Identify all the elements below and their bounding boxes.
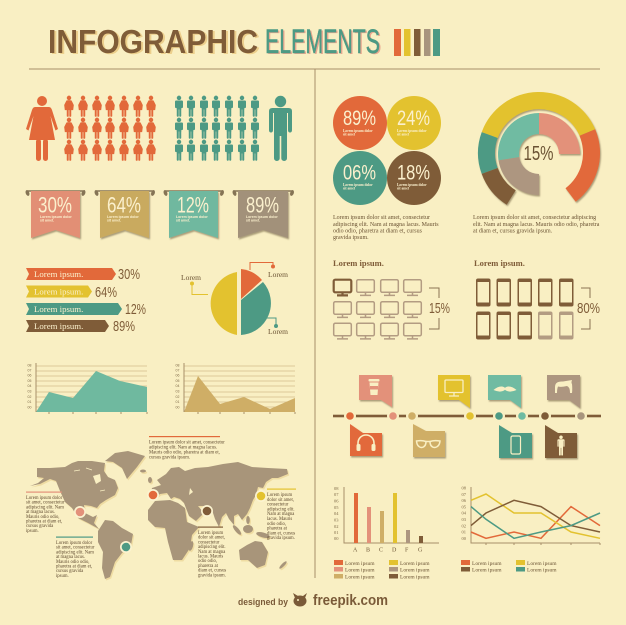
text block: donut caption (473, 215, 600, 234)
chart: line chart: 06 (462, 498, 467, 503)
panel: monitors pictogram (333, 258, 450, 339)
map note: yellow: lacus. Mauris (267, 517, 292, 522)
banner 12% (163, 190, 225, 238)
bar 12%: Lorem ipsum. (34, 304, 83, 314)
banner 12%: Lorem ipsum dolor (176, 215, 208, 219)
map note: orange: adipiscing elit. Nam at magna lacus. (149, 446, 217, 450)
chart: tan area chart: 08 (176, 364, 179, 368)
circle 89%: sit amet (343, 132, 356, 136)
icon: coffee cup (368, 379, 380, 395)
legend: line chart: Lorem ipsum (527, 561, 557, 567)
map note: brown: Lorem ipsum (198, 531, 223, 536)
chart: radial donut: 15% (524, 143, 554, 165)
map note: teal: Lorem ipsum dolor (56, 541, 93, 546)
chart: pie: Lorem (268, 327, 288, 336)
map note: yellow: adipiscing elit. (267, 507, 295, 512)
chart: bar chart: C (379, 548, 383, 554)
map note: teal: at magna lacus. (56, 555, 85, 560)
marker: yellow (255, 490, 267, 502)
circle 06%: 06% (343, 162, 376, 184)
banner 89%: Lorem ipsum dolor (246, 215, 278, 219)
bar 89% (26, 318, 135, 335)
callout: mustache (488, 375, 521, 408)
map note: yellow (267, 488, 296, 541)
panel: women pictogram (26, 96, 156, 161)
title: ELEMENTS (266, 24, 382, 62)
chart: bar chart: 02 (334, 524, 338, 529)
text block: circles caption: gravida ipsum. (333, 235, 369, 241)
callout: headphones (350, 424, 382, 456)
banner 12%: sit amet. (176, 218, 190, 222)
circle 18%: 18% (397, 162, 430, 184)
chart: line chart: 08 (462, 486, 467, 490)
chart: bar chart: B (366, 548, 370, 554)
map note: salmon: sit amet, consectetur (26, 501, 65, 506)
map note: brown: lacus. Mauris (198, 554, 223, 560)
chart: mint area chart: 02 (28, 395, 31, 399)
chart: tan area chart: 03 (176, 390, 179, 394)
chart: bar chart: D (392, 548, 397, 554)
map note: yellow: odio odio, (267, 522, 286, 527)
icon: large woman (26, 96, 58, 161)
banner 30%: Lorem ipsum dolor (40, 215, 72, 219)
icon: monitor (445, 380, 463, 396)
banner 89% (232, 190, 295, 238)
icon: mustache (494, 386, 516, 392)
legend: bar chart: Lorem ipsum (400, 574, 430, 580)
map note: yellow: Nam at magna (267, 512, 295, 517)
banner 30%: 30% (38, 192, 72, 218)
chart: bar chart: 06 (334, 498, 339, 504)
marker: brown (201, 505, 213, 517)
bar 30% (26, 266, 140, 283)
footer credit: designed by (238, 597, 289, 608)
map note: yellow: Lorem ipsum (267, 493, 292, 498)
map note: teal: adipiscing elit. Nam (56, 550, 94, 555)
map note: yellow: dolor sit amet, (267, 498, 294, 503)
map note: yellow: consectetur (267, 503, 289, 508)
icon: phone (511, 436, 520, 454)
monitors grid (334, 280, 421, 339)
bar 64%: Lorem ipsum. (34, 286, 83, 296)
banner 64%: Lorem ipsum dolor (107, 215, 139, 219)
bar 89%: 89% (113, 318, 135, 335)
chart: pie: Lorem (181, 273, 201, 282)
map note: orange: Mauris odio odio, pharetra at diam et, (149, 450, 220, 456)
callout: glasses (413, 424, 445, 457)
icon: glasses (416, 441, 440, 448)
banner 64%: sit amet. (107, 218, 121, 222)
circle 18% (387, 151, 441, 205)
map note: orange: Lorem ipsum dolor sit amet, consectetur (149, 440, 225, 446)
chart: mint area chart: 07 (28, 368, 31, 372)
text block: circles caption: Lorem ipsum dolor sit amet, consectetur (333, 215, 430, 221)
callout: coffee cup (359, 375, 392, 407)
bar 64% (26, 284, 117, 301)
chart: line chart: 01 (462, 530, 466, 534)
map note: teal: ipsum. (56, 574, 69, 579)
women rows (64, 96, 156, 161)
circle 06%: Lorem ipsum dolor (343, 183, 373, 187)
circle 24%: 24% (397, 107, 430, 130)
map note: salmon: Mauris odio odio, (26, 515, 59, 520)
chart: mint area chart: 03 (28, 390, 31, 394)
chart: pie (181, 262, 288, 336)
chart: mint area chart: 05 (28, 379, 31, 383)
map note: brown: diam et, cursus (198, 569, 226, 574)
chart: bar chart: A (353, 548, 358, 554)
legend: bar chart: Lorem ipsum (345, 568, 375, 574)
chart: bar chart (334, 486, 439, 554)
footer credit (238, 592, 388, 609)
icon: hair (555, 380, 572, 393)
callout: monitor (438, 375, 470, 408)
bar 64%: 64% (95, 284, 117, 301)
circle 89%: Lorem ipsum dolor (343, 129, 373, 133)
chart: tan area chart: 02 (176, 395, 179, 399)
phones grid (476, 278, 574, 340)
map note: brown: gravida ipsum. (198, 573, 226, 578)
map note: teal: cursus gravida (56, 569, 84, 574)
map note: brown (198, 526, 226, 578)
chart: bar chart: 04 (334, 511, 339, 516)
bar 12%: 12% (125, 301, 146, 318)
map note: yellow: diam et, cursus (267, 531, 295, 536)
map note: teal: Mauris odio odio, (56, 560, 89, 565)
map note: salmon (26, 492, 65, 534)
title (48, 23, 382, 62)
callout: hair (547, 375, 580, 408)
map note: yellow: gravida ipsum. (267, 536, 295, 541)
chart: line chart: 05 (462, 504, 467, 510)
map note: teal: pharetra at diam et, (56, 564, 92, 570)
map note: yellow: pharetra at (267, 527, 288, 532)
text block: donut caption: Lorem ipsum dolor sit amet, consectetur adipiscing (473, 215, 596, 221)
icon: freepik logo (293, 593, 307, 606)
map note: salmon: ipsum. (26, 529, 39, 534)
legend: line chart: Lorem ipsum (527, 568, 557, 574)
chart: mint area chart: 04 (28, 384, 31, 388)
chart: line chart: 02 (462, 524, 466, 528)
chart: tan area chart: 05 (176, 379, 179, 383)
circle 24% (387, 96, 441, 150)
circle 24%: sit amet (397, 132, 410, 136)
map note: teal: sit amet, consectetur (56, 546, 95, 551)
banner 30% (25, 190, 86, 238)
text block: circles caption: adipiscing elit. Nam at magna lacus. Mauris (333, 222, 439, 228)
chart: tan area chart: 07 (176, 368, 179, 372)
legend: bar chart: Lorem ipsum (400, 568, 430, 574)
heading: Lorem ipsum. (474, 258, 525, 268)
chart: line chart: 07 (462, 492, 467, 497)
banner 89%: sit amet. (246, 218, 260, 222)
chart: tan area chart: 04 (176, 384, 179, 388)
text block: circles caption (333, 215, 439, 241)
text block: donut caption: elit. Nam at magna lacus. Mauris odio odio, pharetra (473, 222, 600, 228)
title: INFOGRAPHIC (48, 23, 258, 60)
circle 89% (333, 96, 387, 150)
bar 30%: Lorem ipsum. (34, 269, 83, 279)
panel: percentage circles (333, 96, 441, 205)
chart: line chart: 00 (462, 536, 467, 541)
chart: radial donut (478, 92, 600, 205)
chart: bar chart: 00 (334, 536, 339, 541)
panel: ribbon banners (25, 190, 295, 238)
chart: line chart: 03 (462, 517, 467, 522)
chart: arrow bars (26, 266, 146, 335)
legend: line chart: Lorem ipsum (472, 561, 502, 567)
circle 18%: Lorem ipsum dolor (397, 183, 427, 187)
chart: mint area chart: 06 (28, 374, 31, 378)
banner 12%: 12% (177, 192, 209, 218)
chart: bar chart: G (418, 548, 423, 554)
circle 06% (333, 151, 387, 205)
panel: phones pictogram (474, 258, 600, 340)
bar 12% (26, 301, 146, 318)
text block: donut caption: at diam et, cursus gravida ipsum. (473, 228, 553, 234)
map note: brown: dolor sit amet, (198, 536, 225, 541)
circle 18%: sit amet (397, 186, 410, 190)
callout: phone (499, 425, 532, 458)
banner 30%: sit amet. (40, 218, 54, 222)
marker: salmon (74, 506, 86, 518)
chart: world map (30, 451, 289, 580)
title: ELEMENTS (265, 23, 380, 61)
map note: brown: consectetur (198, 540, 220, 545)
map note: salmon: adipiscing elit. Nam (26, 505, 64, 510)
bracket and value: 80% (577, 300, 600, 317)
chart: mint area chart: 08 (28, 364, 31, 368)
chart: line chart: 04 (462, 510, 467, 516)
banner 89%: 89% (246, 192, 279, 218)
heading: Lorem ipsum. (333, 258, 384, 268)
circle 24%: Lorem ipsum dolor (397, 129, 427, 133)
men rows (175, 96, 259, 161)
chart: bar chart: F (405, 548, 409, 554)
bar 89%: Lorem ipsum. (34, 321, 83, 331)
chart: bar chart: 03 (334, 518, 339, 522)
map note: teal (56, 536, 95, 579)
chart: mint area chart: 00 (28, 406, 31, 410)
legend: bar chart: Lorem ipsum (345, 561, 375, 567)
marker: teal (120, 541, 132, 553)
circle 06%: sit amet (343, 186, 356, 190)
icon: person (557, 435, 565, 456)
panel: men pictogram (175, 96, 292, 161)
bracket and value: 15% (429, 300, 450, 317)
chart: mint area chart (28, 363, 147, 414)
chart: line chart (462, 486, 600, 545)
colour stripes (394, 29, 440, 56)
map note: salmon: Lorem ipsum dolor (26, 496, 63, 501)
map note: brown: pharetra at (198, 564, 219, 569)
map note: brown: Nam at magna (198, 550, 226, 555)
map note: salmon: cursus gravida (26, 524, 54, 529)
text block: circles caption: odio odio, pharetra at diam et, cursus (333, 228, 423, 234)
map note: orange (149, 436, 225, 460)
legend: bar chart (334, 560, 430, 580)
chart: tan area chart: 06 (176, 374, 179, 378)
map note: salmon: at magna lacus. (26, 510, 55, 515)
banner 64% (94, 190, 156, 238)
chart: bar chart: 08 (334, 486, 339, 491)
chart: tan area chart (176, 363, 295, 414)
chart: bar chart: 05 (334, 505, 339, 510)
legend: line chart (461, 560, 557, 574)
chart: tan area chart: 01 (176, 400, 179, 404)
chart: mint area chart: 01 (28, 400, 31, 404)
title: INFOGRAPHIC (50, 24, 260, 61)
callout: person (545, 425, 577, 458)
footer credit: freepik.com (313, 592, 388, 609)
chart: pie: Lorem (268, 270, 288, 279)
chart: bar chart: 01 (334, 530, 338, 535)
bar 30%: 30% (118, 266, 140, 283)
marker: orange (147, 489, 159, 501)
icon: headphones (356, 435, 376, 451)
map note: brown: odio odio, (198, 559, 217, 564)
chart: tan area chart: 00 (176, 406, 179, 410)
circle 89%: 89% (343, 107, 376, 130)
map note: orange: cursus gravida ipsum. (149, 456, 190, 460)
banner 64%: 64% (107, 192, 141, 218)
legend: bar chart: Lorem ipsum (345, 574, 375, 580)
map note: brown: adipiscing elit. (198, 545, 226, 550)
icon: large man (269, 96, 292, 161)
legend: bar chart: Lorem ipsum (400, 561, 430, 567)
map note: salmon: pharetra at diam et, (26, 520, 62, 524)
chart: bar chart: 07 (334, 492, 339, 497)
legend: line chart: Lorem ipsum (472, 568, 502, 574)
timeline (333, 410, 601, 422)
